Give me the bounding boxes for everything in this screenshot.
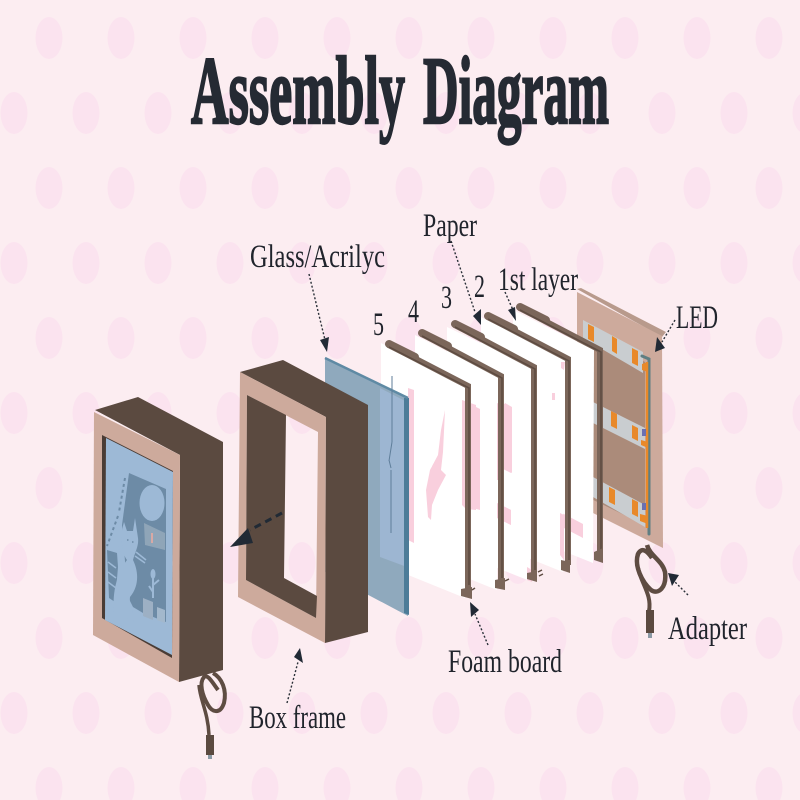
label: adapter	[668, 573, 747, 647]
wires	[642, 356, 649, 534]
label: 1st layer: 1st layer	[498, 262, 578, 298]
label: paper: Paper	[423, 208, 477, 244]
label: 1st layer	[498, 262, 578, 321]
label: glass acrylic	[250, 239, 385, 352]
cat silhouette	[114, 518, 138, 622]
title: Diagram	[423, 37, 609, 144]
left cable	[199, 673, 225, 759]
brown backing	[583, 330, 645, 525]
label: LED	[655, 300, 718, 352]
foam strip	[389, 344, 475, 599]
label: layer numbers: 3	[441, 280, 452, 316]
layer 5 sheet	[381, 343, 476, 599]
layer 1 sheet	[513, 307, 603, 563]
foam strip	[422, 333, 509, 590]
foam strip	[520, 307, 603, 563]
adapter cable	[637, 545, 665, 638]
layer 4 sheet	[415, 333, 511, 590]
label: layer numbers: 2	[474, 269, 485, 305]
window box	[144, 523, 165, 550]
frame interior	[246, 395, 317, 618]
LED chips	[588, 324, 648, 524]
title: Assembly	[191, 37, 405, 144]
label: glass acrylic: Glass/Acrilyc	[250, 239, 385, 275]
foam strip	[488, 316, 570, 573]
label: LED: LED	[676, 300, 718, 336]
foam strip	[455, 324, 543, 582]
layer 2 sheet	[481, 316, 570, 573]
label: paper	[423, 208, 481, 325]
glass acrylic panel	[325, 358, 409, 616]
LED strips	[583, 320, 645, 527]
pots	[143, 598, 153, 620]
left curtain	[107, 550, 118, 602]
label: box frame	[249, 648, 346, 736]
label: adapter: Adapter	[668, 611, 747, 647]
screen	[105, 438, 173, 655]
label: layer numbers: 4	[408, 294, 419, 330]
finished frame	[93, 397, 223, 682]
bird cutout	[426, 410, 446, 520]
dashed assembly arrow	[230, 513, 282, 547]
layer 3 sheet	[447, 324, 543, 582]
moon	[140, 485, 164, 521]
plant	[149, 570, 159, 598]
label: foam board: Foam board	[448, 644, 562, 680]
label: foam board	[448, 602, 562, 680]
box frame	[238, 360, 368, 643]
label: box frame: Box frame	[249, 700, 346, 736]
label: layer numbers	[373, 269, 485, 343]
screen artwork	[107, 473, 166, 623]
dark night background	[122, 473, 166, 622]
label: layer numbers: 5	[373, 307, 384, 343]
LED board	[577, 288, 666, 548]
